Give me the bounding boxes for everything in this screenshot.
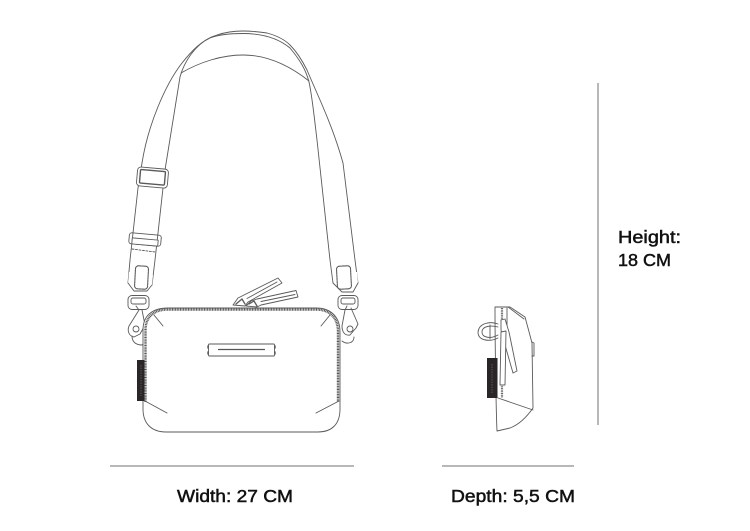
side brand tag	[487, 358, 498, 398]
side zipper seam	[501, 308, 503, 398]
front logo plate	[208, 344, 275, 356]
upper strap buckle	[136, 167, 169, 188]
right strap tab and swivel hook	[333, 266, 358, 343]
corner crease lines	[145, 315, 339, 413]
zipper pulls	[233, 278, 298, 307]
height label: 18 CM	[618, 250, 671, 270]
illustration: side view of bag	[478, 307, 534, 431]
brand label tag	[137, 360, 144, 401]
side ring	[478, 323, 498, 340]
height label: Height:	[618, 227, 681, 247]
shoulder strap	[128, 31, 358, 285]
width label: Width: 27 CM	[177, 486, 293, 506]
side zipper pulls	[500, 319, 517, 385]
zipper seam	[146, 310, 338, 402]
side body	[495, 307, 533, 431]
height measure line	[597, 83, 599, 425]
left strap tab and swivel hook	[128, 266, 153, 345]
side panel lines	[498, 307, 534, 410]
depth label: Depth: 5,5 CM	[451, 486, 575, 506]
illustration: front view of bag with strap	[128, 31, 358, 432]
depth measure line	[442, 465, 574, 467]
height label	[618, 227, 681, 270]
width measure line	[110, 465, 354, 467]
lower strap slider	[129, 233, 161, 252]
bag body	[143, 308, 340, 432]
